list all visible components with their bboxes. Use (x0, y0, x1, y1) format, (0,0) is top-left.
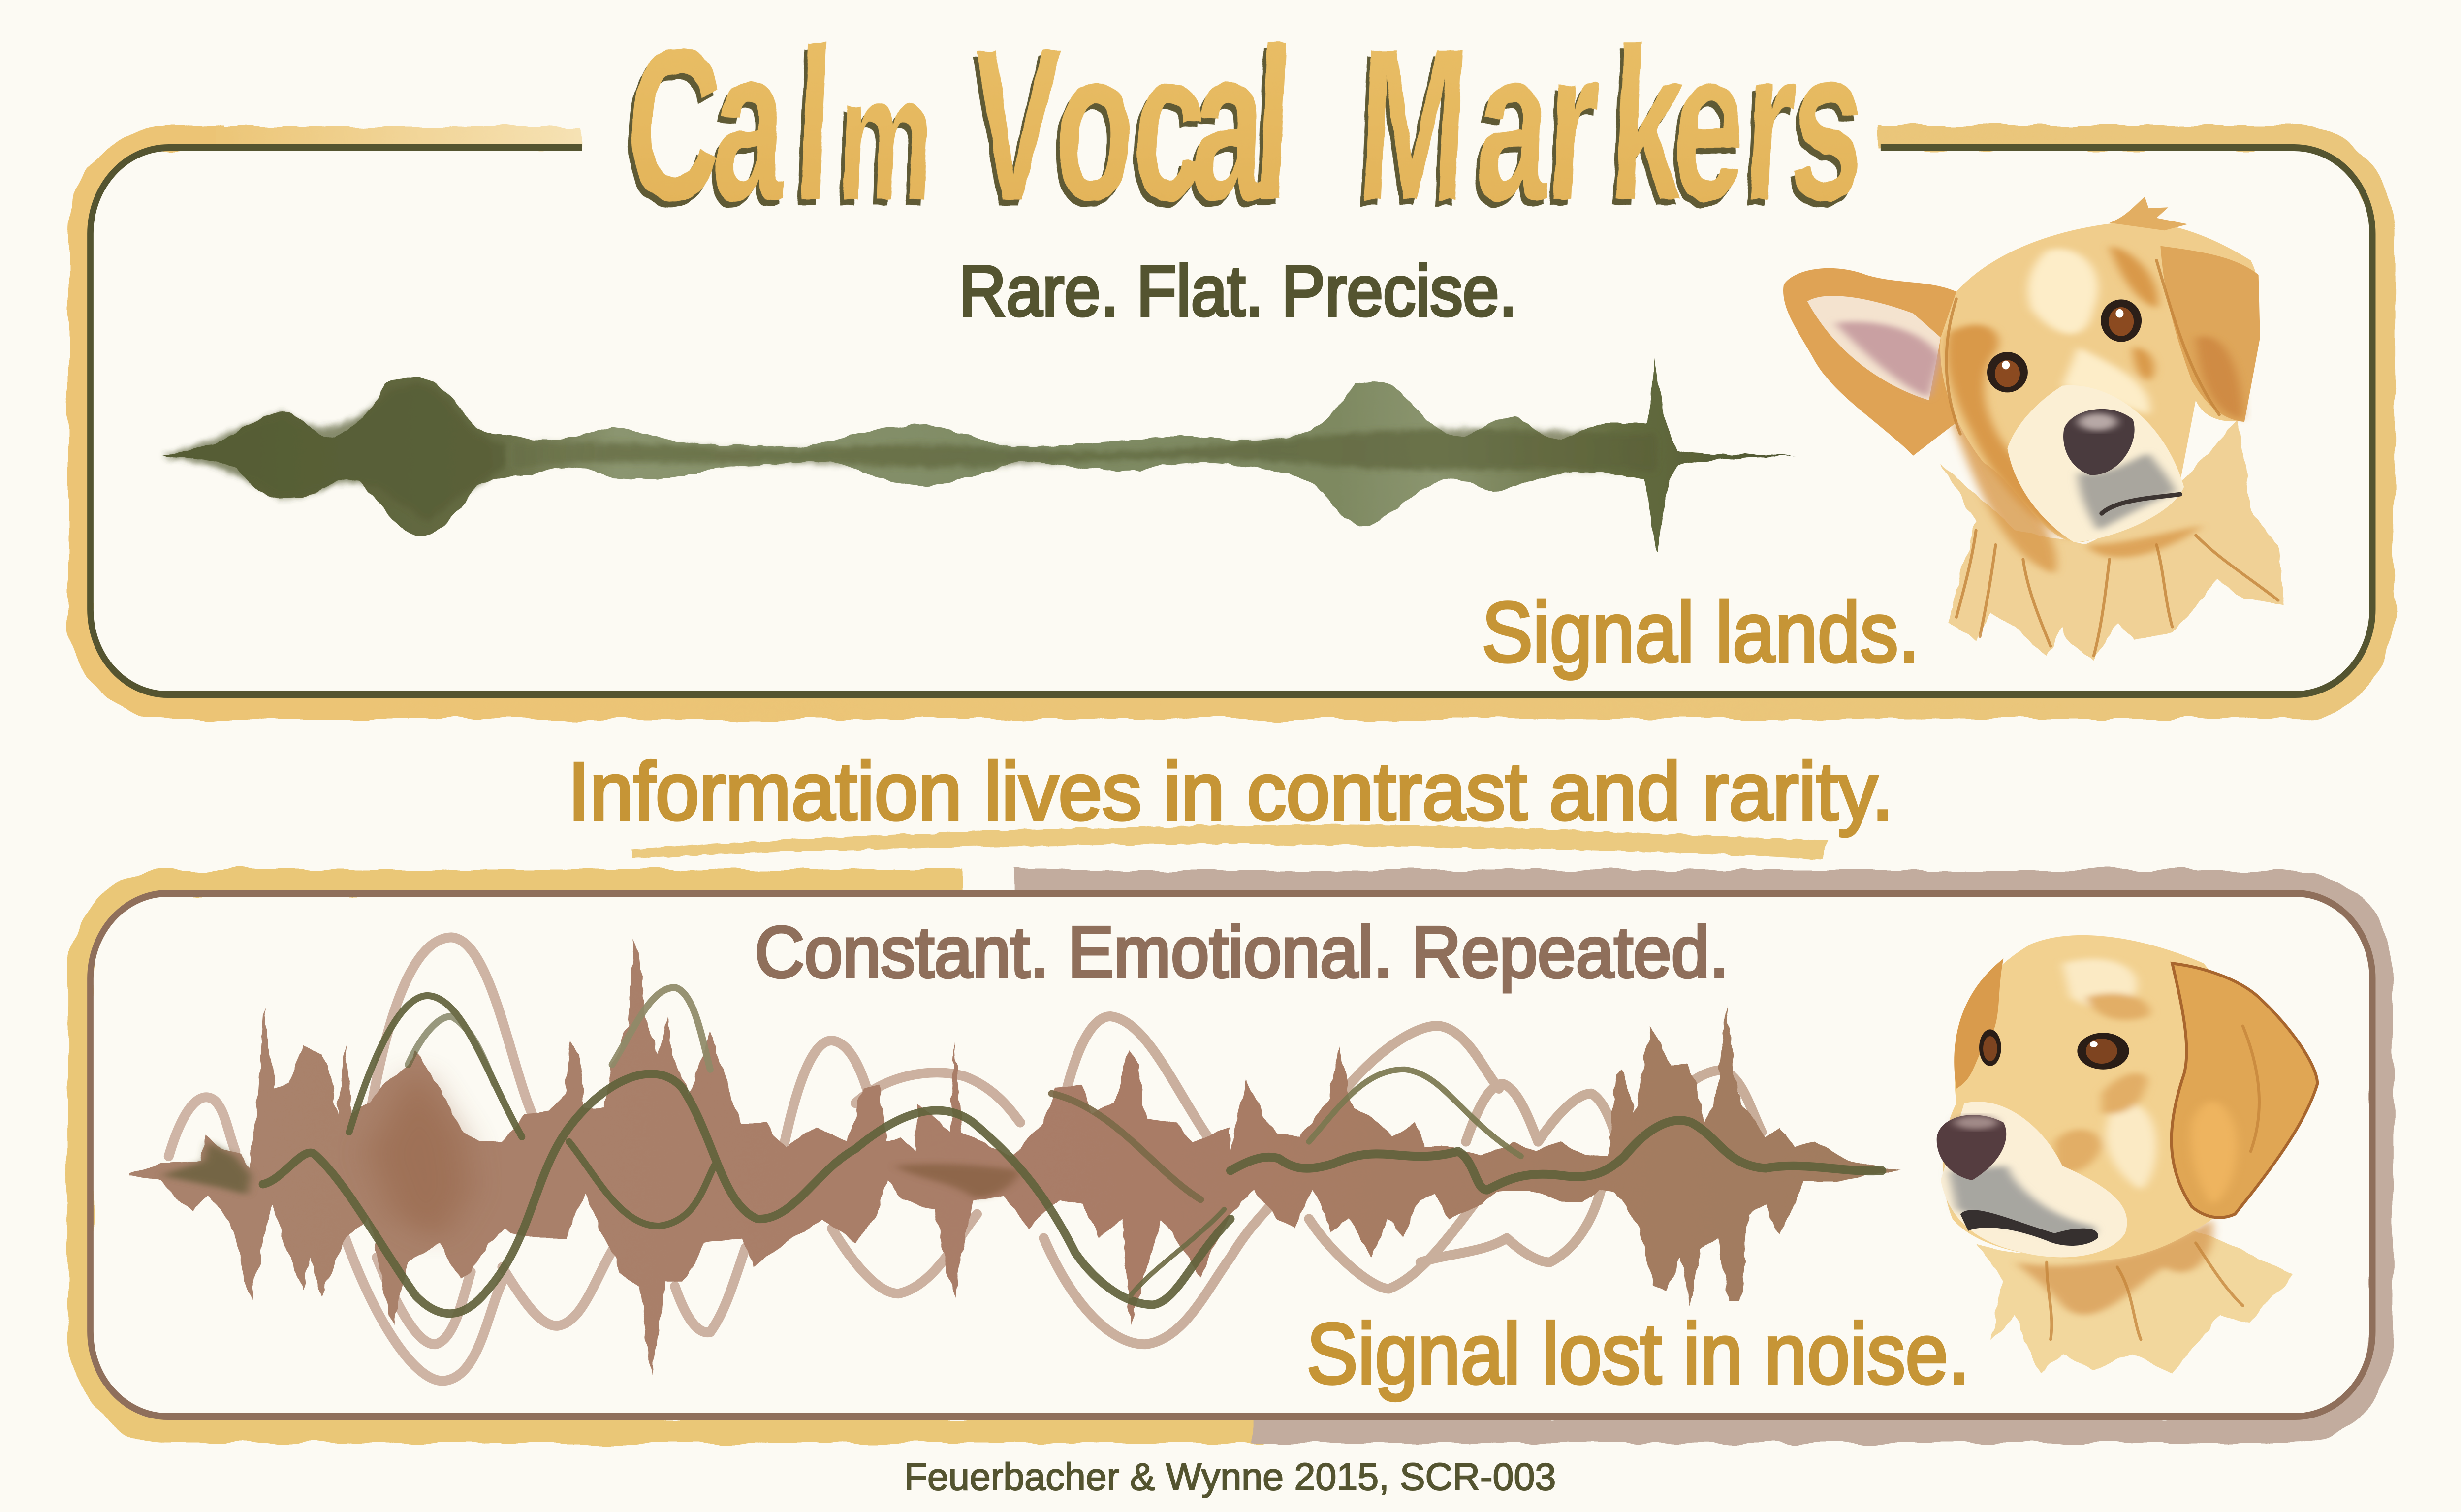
icon: looking-away dog (1937, 935, 2317, 1373)
result label: Signal lost in noise. (1306, 1306, 1970, 1402)
olive signal lines (263, 987, 1882, 1314)
droop ear shade (2196, 336, 2243, 419)
olive bloom left (161, 1142, 251, 1195)
ear shade (2191, 1102, 2237, 1204)
pale loops (169, 937, 1762, 1381)
frame gold part (80, 882, 1265, 1430)
nose highlight (1954, 1116, 1998, 1129)
eye far (1979, 1029, 2001, 1066)
neck shading (2015, 1219, 2213, 1315)
eye right (2101, 299, 2142, 342)
frame taupe part (1015, 882, 2382, 1430)
fur strands (1947, 260, 2278, 656)
head highlights and patches (2054, 959, 2156, 1190)
head tuft (2110, 197, 2188, 230)
nose (1937, 1115, 2006, 1180)
muzzle grey (2078, 453, 2176, 531)
title: Calm Vocal Markers (622, 3, 1870, 245)
tagline: Constant. Emotional. Repeated. (755, 912, 1729, 992)
muzzle (1941, 1102, 2127, 1257)
muzzle grey (1949, 1166, 2095, 1240)
ear outer (1783, 268, 1960, 456)
olive outline (91, 148, 2372, 694)
neck fur (1976, 1219, 2294, 1373)
calm waveform (160, 357, 1797, 552)
fur strands (2047, 1026, 2259, 1339)
ear pink (1835, 322, 1941, 398)
brush underline (632, 824, 1829, 859)
neck shading (1953, 414, 2204, 574)
mouth (2102, 494, 2180, 513)
rust bloom (369, 1065, 471, 1243)
waveform dark core (514, 429, 1658, 472)
waveform body (160, 357, 1797, 552)
drooping ear (2160, 246, 2260, 422)
droopy ear (2172, 963, 2317, 1218)
tagline: Rare. Flat. Precise. (959, 252, 1517, 331)
result label: Signal lands. (1482, 585, 1920, 680)
brown outline (91, 893, 2372, 1417)
citation: Feuerbacher & Wynne 2015, SCR-003 (904, 1455, 1556, 1498)
panel: calm signal (80, 137, 2383, 707)
head highlights (1947, 246, 2158, 540)
nose (2063, 409, 2135, 475)
brown knot (895, 1164, 1020, 1197)
watercolor frame (80, 882, 2382, 1430)
icon: alert dog (1783, 197, 2284, 661)
takeaway heading: Information lives in contrast and rarity. (568, 745, 1893, 837)
eye near (2077, 1033, 2129, 1070)
gold watercolor frame (80, 137, 2383, 707)
eye left (1987, 352, 2028, 392)
neck fur (1941, 419, 2284, 661)
head (1940, 222, 2259, 542)
waveform left dark mass (160, 383, 505, 522)
spiky noise mass (129, 939, 1901, 1376)
nose highlight (2078, 413, 2117, 431)
noisy waveform (129, 937, 1901, 1381)
panel: noisy signal (80, 882, 2382, 1430)
mouth (1960, 1210, 2098, 1246)
muzzle (2007, 385, 2184, 542)
left fur edge (1954, 958, 2003, 1089)
ear inner (1807, 296, 1941, 400)
head (1943, 935, 2239, 1260)
